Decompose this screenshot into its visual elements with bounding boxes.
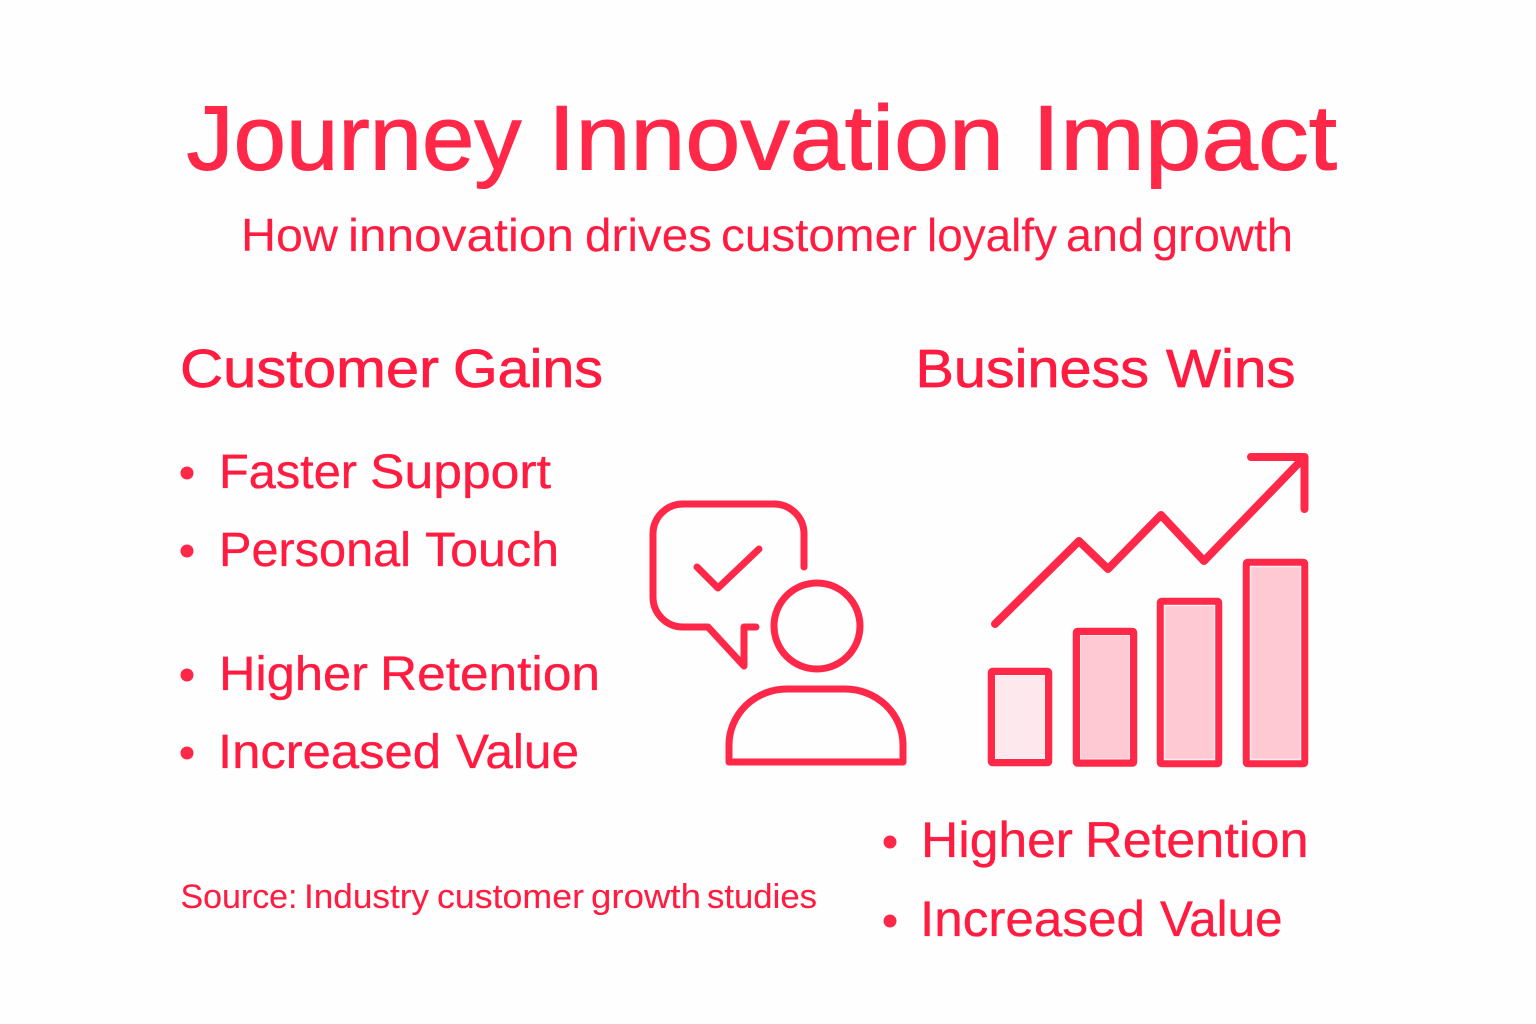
bar 3 [1160, 602, 1218, 764]
check mark [697, 549, 759, 588]
heading: business wins: Business [916, 339, 1149, 399]
heading: customer gains: Customer [180, 339, 439, 399]
subtitle: customer [721, 209, 917, 261]
subtitle: drives [585, 209, 712, 261]
title: Impact [1032, 88, 1337, 190]
bullet: faster support: Support [370, 446, 551, 499]
subtitle: How [241, 209, 339, 261]
source note: growth [591, 878, 701, 916]
bullet: higher retention: Higher [219, 648, 368, 701]
panel: customer gains [180, 339, 603, 779]
subtitle [241, 209, 1293, 261]
bullet: higher retention: Retention [1085, 812, 1308, 868]
bullet: faster support [180, 446, 551, 499]
bar 1 [992, 672, 1048, 762]
speech bubble [653, 504, 804, 666]
subtitle: and [1066, 209, 1144, 261]
title: Innovation [548, 88, 1004, 190]
bullet: personal touch: Touch [425, 524, 559, 577]
heading: customer gains: Gains [453, 339, 603, 399]
heading: business wins [916, 339, 1296, 399]
subtitle: growth [1152, 209, 1293, 261]
panel: business wins [884, 339, 1308, 947]
source note: Source: [180, 878, 298, 916]
source note: customer [437, 878, 584, 916]
bullet: increased value: Increased [218, 726, 441, 779]
title [186, 88, 1337, 190]
bullet: higher retention [884, 812, 1308, 868]
person body [729, 689, 903, 762]
bullet: faster support: Faster [219, 446, 357, 499]
bullet: personal touch [180, 524, 559, 577]
bullet: increased value [180, 726, 579, 779]
bullet: increased value [884, 891, 1282, 947]
subtitle: innovation [348, 209, 574, 261]
icon: customer with speech bubble and check mark [653, 504, 903, 762]
trend arrow [995, 457, 1304, 624]
person head [774, 583, 860, 669]
source note [180, 878, 817, 916]
bullet: increased value: Value [456, 726, 579, 779]
source note: Industry [304, 878, 429, 916]
bullet: increased value: Value [1160, 891, 1282, 947]
bar 4 [1246, 562, 1304, 764]
bullet: higher retention: Higher [921, 812, 1073, 868]
bullet: increased value: Increased [920, 891, 1145, 947]
bar 2 [1076, 632, 1134, 763]
bullet: higher retention: Retention [380, 648, 600, 701]
heading: customer gains [180, 339, 603, 399]
source note: studies [707, 878, 817, 916]
title: Journey [186, 88, 522, 190]
subtitle: loyalfy [927, 209, 1057, 261]
heading: business wins: Wins [1166, 339, 1296, 399]
bullet: higher retention [180, 648, 600, 701]
bullet: personal touch: Personal [219, 524, 411, 577]
icon: growth bar chart with arrow [992, 457, 1304, 764]
